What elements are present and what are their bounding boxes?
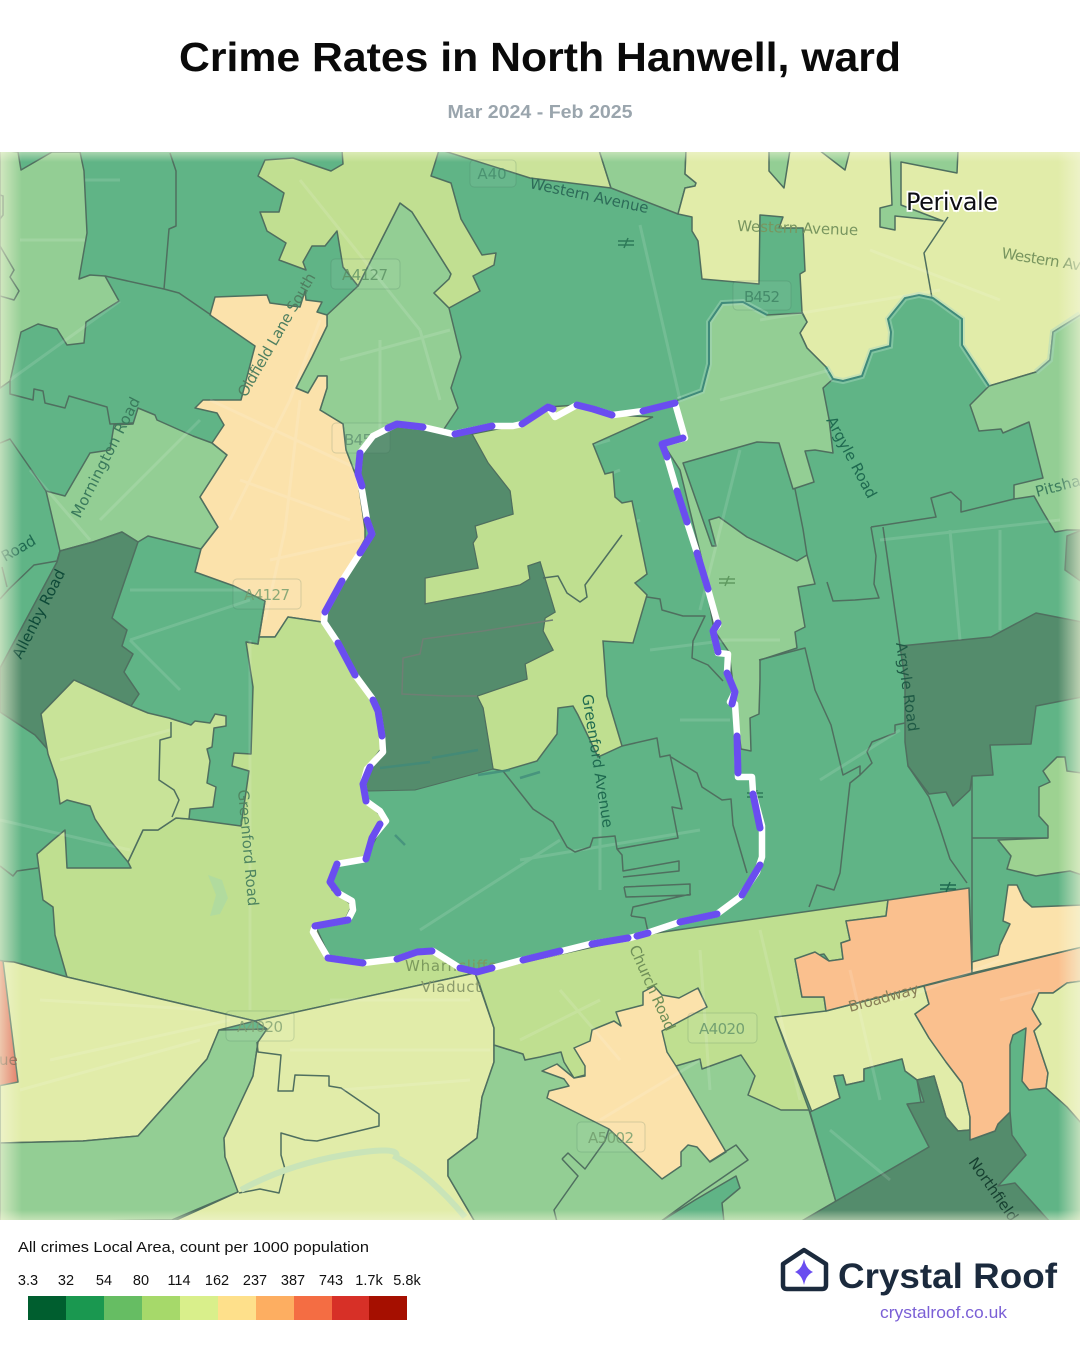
area: Perivale top light shapes xyxy=(769,150,958,230)
area: Broadway orange south xyxy=(915,947,1080,1140)
map edge fade xyxy=(0,152,1080,1220)
area: south-east pale yellow xyxy=(775,986,970,1131)
title: Crime Rates in North Hanwell, ward xyxy=(179,34,901,80)
legend scale labels: 237 xyxy=(243,1273,267,1289)
area: Mornington Road light green xyxy=(46,408,227,551)
shield: B452 xyxy=(733,281,791,310)
shield: B452 west: B45 xyxy=(344,431,372,449)
area: east light green estate xyxy=(998,757,1080,876)
shield: A40 xyxy=(470,160,516,187)
logo wordmark: Crystal Roof xyxy=(838,1257,1057,1296)
label: Argyle Road north: Argyle Road xyxy=(822,413,881,501)
rivers along Perivale boundary xyxy=(678,295,1080,400)
icon: rail station north xyxy=(618,238,634,248)
subtitle: date range: Mar 2024 - Feb 2025 xyxy=(448,101,632,122)
area: Oldfield Lane peach high-crime xyxy=(195,291,365,637)
legend scale labels xyxy=(18,1273,421,1289)
area: Church Road peach xyxy=(542,986,726,1179)
ward interior: dark green block xyxy=(324,424,555,791)
label: Northfield: Northfield xyxy=(965,1154,1022,1225)
area: north-east light green xyxy=(970,314,1080,532)
area: central north light green xyxy=(296,203,461,481)
legend scale labels: 32 xyxy=(58,1273,74,1289)
icon: rail station south-east xyxy=(940,882,956,892)
canal xyxy=(241,1150,465,1217)
shield: B452 west xyxy=(332,423,390,453)
shield: A4020 east: A4020 xyxy=(699,1020,745,1038)
area: east light green xyxy=(664,302,833,751)
icon: house with star xyxy=(783,1250,826,1289)
area: top strip yellow-green xyxy=(441,150,611,188)
area: west yellow-green estate xyxy=(41,680,226,862)
logo url: crystalroof.co.uk xyxy=(880,1304,1008,1322)
area: north yellow-green xyxy=(258,150,496,308)
shield: B452: B452 xyxy=(744,288,780,306)
label: Wharncliffe Viaduct: Wharncliffe xyxy=(405,957,497,975)
road labels and shields xyxy=(0,160,1080,1225)
boundary: south pale inner line xyxy=(239,1042,379,1193)
label: Broadway: Broadway xyxy=(846,980,921,1016)
label: Wharncliffe Viaduct: Viaduct xyxy=(421,978,481,996)
area: south-east mid green xyxy=(810,1059,929,1202)
area: top light green xyxy=(599,150,696,214)
legend title: All crimes Local Area, count per 1000 population xyxy=(18,1240,369,1256)
area: east peach xyxy=(972,885,1080,973)
shield: A40: A40 xyxy=(477,165,507,183)
shield: A4127 north xyxy=(331,259,400,289)
area: south pale yellow xyxy=(172,973,494,1222)
label: Greenford Road: Greenford Road xyxy=(234,789,262,907)
label: Wharncliffe Viaduct xyxy=(405,957,497,996)
label: Argyle Road south: Argyle Road xyxy=(892,641,922,733)
park pond xyxy=(208,875,228,916)
area: south-west light green xyxy=(0,1029,267,1222)
label: Western Avenue west: Western Avenue xyxy=(528,174,650,217)
label: Mornington Road: Mornington Road xyxy=(68,394,144,521)
area: red high-crime edge xyxy=(0,960,18,1086)
shield: A5002 xyxy=(577,1122,645,1152)
shield: A4020 west xyxy=(226,1011,294,1041)
legend scale labels: 743 xyxy=(319,1273,343,1289)
area: Perivale pale yellow xyxy=(678,150,1080,386)
legend scale labels: 387 xyxy=(281,1273,305,1289)
shield: A4127 north: A4127 xyxy=(342,266,388,284)
area: Allenby Road dark green xyxy=(0,532,139,752)
area: Church Road yellow-green xyxy=(475,900,888,1110)
shield: A4020 east xyxy=(688,1013,757,1043)
area: north-west light green xyxy=(0,150,119,388)
ward interior: dark block boundary xyxy=(402,620,553,696)
area: east dark green high block xyxy=(900,613,1080,806)
shield: A4127 south: A4127 xyxy=(244,586,290,604)
label: Greenford Avenue: Greenford Avenue xyxy=(578,693,617,829)
icon: rail station centre xyxy=(719,576,735,586)
area: Northfield dark green xyxy=(800,1076,1050,1222)
legend scale labels: 54 xyxy=(96,1273,112,1289)
ward boundary purple dashes xyxy=(315,403,760,972)
legend scale labels: 162 xyxy=(205,1273,229,1289)
icon: rail station south xyxy=(747,790,763,800)
road network xyxy=(0,180,1060,1180)
area: Broadway orange north xyxy=(795,888,972,1011)
label: Church Road: Church Road xyxy=(625,942,679,1034)
legend scale labels: 5.8k xyxy=(393,1273,421,1289)
shield: A4020 west: A4020 xyxy=(237,1018,283,1036)
area: far east pale yellow xyxy=(1032,981,1080,1124)
legend scale labels: 3.3 xyxy=(18,1273,38,1289)
boundary: west estate inner line xyxy=(159,722,179,817)
legend scale labels: 114 xyxy=(167,1273,191,1289)
ward interior: yellow-green block xyxy=(425,405,653,771)
label: Perivale: Perivale xyxy=(906,188,998,216)
ward interior: boundary lines xyxy=(503,535,747,932)
choropleth map panel xyxy=(0,150,1080,1225)
label: Western Avenue east: Western Av xyxy=(1000,244,1080,274)
streams in ward xyxy=(380,750,540,845)
boundaries: west region lines xyxy=(0,153,265,876)
legend scale labels: 80 xyxy=(133,1273,149,1289)
boundary: Perivale inner line xyxy=(924,217,948,298)
area: south-west pale yellow xyxy=(0,961,255,1143)
shield: A4127 south xyxy=(233,579,301,609)
label: Allenby Road: Allenby Road xyxy=(9,566,69,662)
area: south-centre light green xyxy=(448,1040,836,1222)
ward boundary outline xyxy=(313,403,762,972)
area: east edge dark green xyxy=(1065,530,1080,582)
label: Western Avenue centre: Western Avenue xyxy=(737,217,858,239)
legend colour scale xyxy=(28,1296,407,1320)
logo: Crystal Roof xyxy=(783,1250,1057,1322)
area: south mid-green sliver xyxy=(660,1176,740,1222)
area: park yellow-green xyxy=(37,617,475,1021)
boundaries: east region lines xyxy=(759,489,1048,960)
label: Oldfield Lane South: Oldfield Lane South xyxy=(234,270,319,400)
boundaries: south-centre lines xyxy=(554,1129,748,1222)
shield: A5002: A5002 xyxy=(588,1129,634,1147)
legend scale labels: 1.7k xyxy=(355,1273,383,1289)
